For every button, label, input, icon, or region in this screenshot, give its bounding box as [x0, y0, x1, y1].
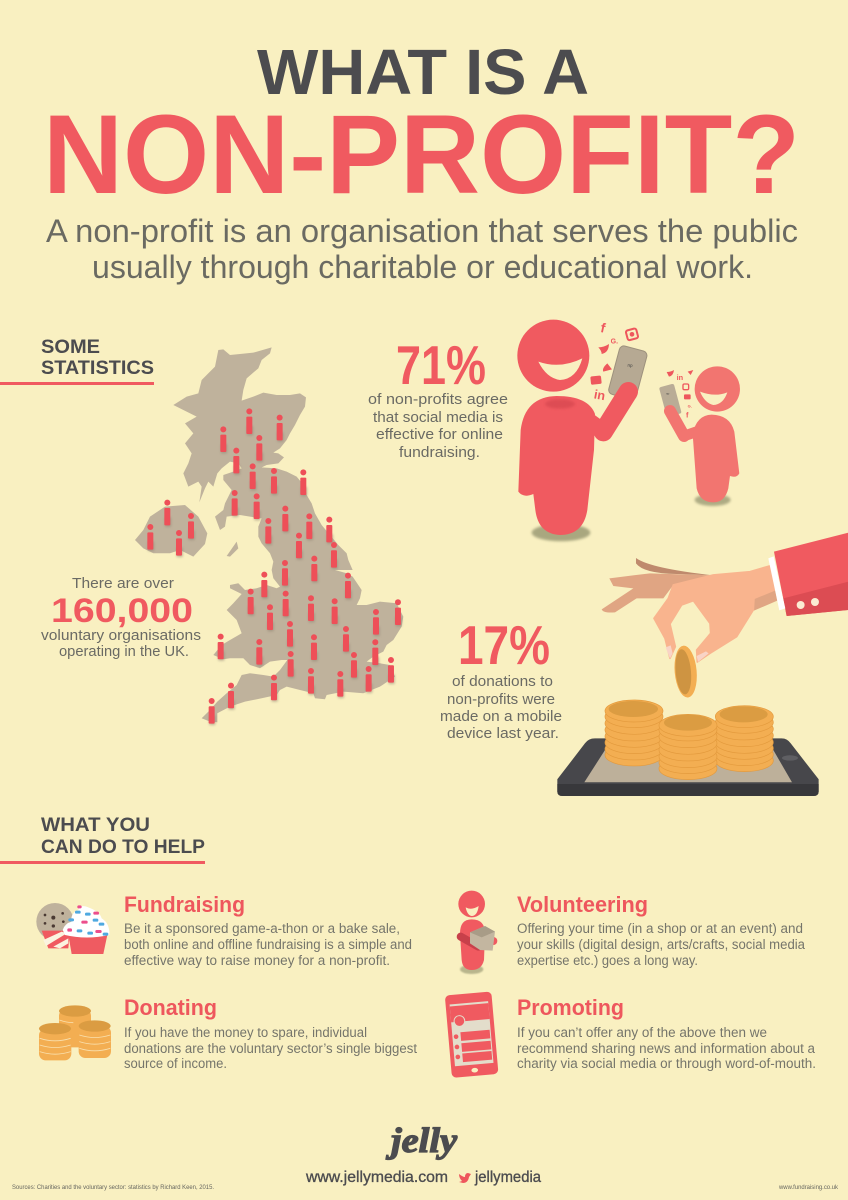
map: Great Britain [173, 347, 403, 722]
text block [124, 1025, 417, 1071]
social icons, large [590, 320, 638, 403]
heading: Donating [124, 995, 217, 1020]
source url: www.fundraising.co.uk [778, 1184, 839, 1191]
social icons, large: in [593, 387, 606, 403]
small person [659, 366, 740, 506]
stat: 17% mobile donations: of donations to [452, 673, 553, 690]
tablet [557, 738, 819, 796]
stat: 71% social media [368, 334, 508, 461]
text block: both online and offline fundraising is a simple and [124, 937, 412, 952]
stat: 17% mobile donations [440, 614, 562, 742]
heading: Fundraising [124, 892, 245, 917]
stat: 160,000 organisations: operating in the UK. [59, 643, 189, 660]
stat: 71% social media: effective for online [376, 426, 503, 443]
text block: Offering your time (in a shop or at an event) and [517, 921, 803, 936]
heading: what you can do to help: CAN DO TO HELP [41, 837, 205, 858]
text block: charity via social media or through word-of-mouth. [517, 1056, 816, 1071]
pins [147, 408, 402, 725]
hand [602, 558, 777, 662]
icon: twitter bird [459, 1173, 471, 1183]
website: www.jellymedia.com [305, 1169, 448, 1186]
text block: your skills (digital design, arts/crafts, social media [517, 937, 805, 952]
stat: 160,000 organisations: There are over [72, 575, 174, 592]
stat: 17% mobile donations: 17% [458, 614, 550, 676]
title: NON-PROFIT? [43, 92, 800, 217]
falling coin [672, 645, 699, 698]
twitter handle: jellymedia [474, 1169, 541, 1186]
social icons, large: G. [611, 338, 618, 345]
source credit: Sources: Charities and the voluntary sector: statistics by Richard Keen, 2015. [12, 1184, 214, 1191]
text block [124, 921, 412, 968]
panel: promoting [445, 991, 816, 1078]
logo: jelly: jelly [386, 1121, 458, 1160]
title [43, 36, 800, 217]
map: Isle of Man [227, 542, 238, 557]
heading: some statistics: SOME [41, 337, 100, 358]
stat: 71% social media: of non-profits agree [368, 391, 508, 408]
heading: Volunteering [517, 892, 648, 917]
heading: some statistics: STATISTICS [41, 358, 154, 379]
suit sleeve [768, 533, 848, 616]
social icons, small: f [686, 410, 689, 419]
text block: Be it a sponsored game-a-thon or a bake sale, [124, 921, 400, 936]
stat: 17% mobile donations: non-profits were [447, 691, 555, 708]
text block: source of income. [124, 1056, 227, 1071]
large person: np [627, 363, 633, 368]
heading: some statistics [0, 337, 154, 385]
panel: fundraising [36, 892, 412, 968]
stat: 160,000 organisations: 160,000 [51, 592, 193, 630]
text block: recommend sharing news and information about a [517, 1041, 815, 1056]
text block [517, 1025, 816, 1071]
UK map with pins [135, 347, 403, 725]
heading: what you can do to help [0, 815, 205, 864]
stat: 160,000 organisations [41, 575, 201, 660]
stat: 17% mobile donations: device last year. [447, 725, 559, 742]
text block: If you have the money to spare, individual [124, 1025, 367, 1040]
subtitle [46, 213, 798, 285]
icon: cookie and cupcake [36, 903, 109, 954]
social icons, small: in [677, 373, 684, 382]
title: WHAT IS A [257, 36, 589, 108]
icon: phone with social feed [445, 991, 498, 1078]
subtitle: A non-profit is an organisation that serves the public [46, 213, 798, 249]
text block: effective way to raise money for a non-profit. [124, 953, 390, 968]
social icons, small: G. [688, 403, 692, 408]
coin stacks [605, 700, 773, 780]
panel: volunteering [458, 891, 805, 974]
stat: 71% social media: fundraising. [399, 444, 480, 461]
social icons, large: f [599, 320, 607, 336]
stat: 71% social media: 71% [396, 334, 486, 396]
text block: expertise etc.) goes a long way. [517, 953, 698, 968]
social icons, small [667, 370, 693, 419]
illustration: two people with phones [517, 320, 740, 541]
stat: 71% social media: that social media is [373, 409, 503, 426]
icon: person carrying box [458, 891, 497, 974]
stat: 17% mobile donations: made on a mobile [440, 708, 562, 725]
stat: 160,000 organisations: voluntary organisations [41, 627, 201, 644]
subtitle: usually through charitable or educational work. [92, 249, 753, 285]
small person: np [666, 391, 670, 395]
text block [517, 921, 805, 968]
icon: coin piles [39, 1005, 111, 1060]
illustration: hand dropping coin on tablet [557, 533, 848, 796]
text block: If you can’t offer any of the above then we [517, 1025, 767, 1040]
text block: donations are the voluntary sector’s single biggest [124, 1041, 417, 1056]
map: Northern Ireland [135, 505, 207, 557]
heading: what you can do to help: WHAT YOU [41, 815, 150, 836]
heading: Promoting [517, 995, 624, 1020]
panel: donating [39, 995, 417, 1071]
large person [517, 320, 648, 541]
